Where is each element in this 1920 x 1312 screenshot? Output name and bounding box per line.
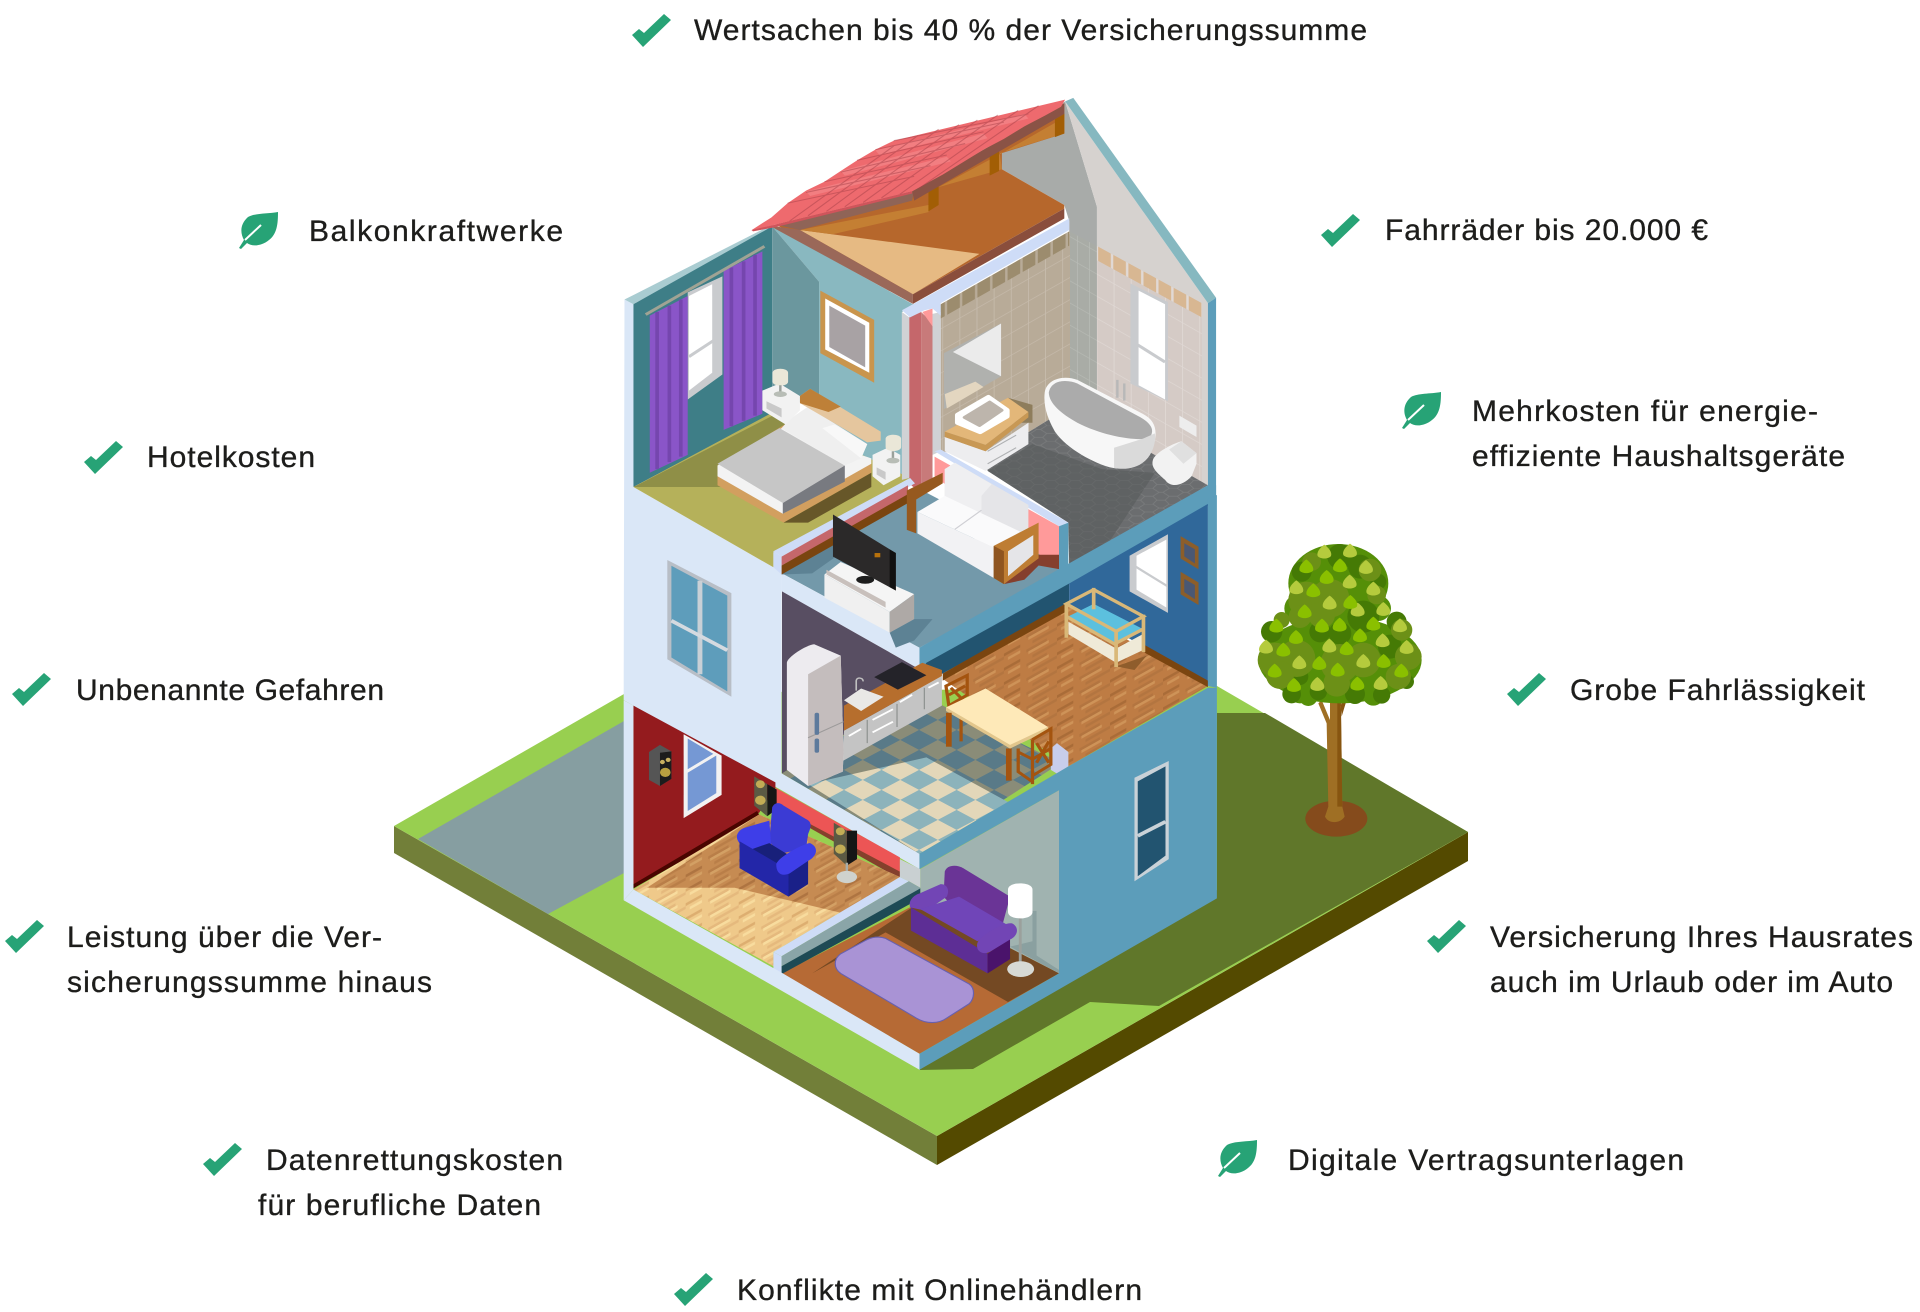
left facade window — [667, 560, 731, 697]
roof tiles — [752, 100, 1065, 231]
item: Versicherung Ihres Hausrates — [1427, 920, 1913, 999]
house left facade — [624, 300, 919, 869]
bathroom — [941, 231, 1208, 567]
bedroom — [624, 225, 914, 567]
item: Grobe Fahrlässigkeit: Grobe Fahrlässigkeit — [1570, 674, 1866, 707]
gable walls — [992, 98, 1216, 505]
item: Mehrkosten — [1402, 392, 1845, 473]
item: Versicherung Ihres Hausrates: Versicherung Ihres Hausrates — [1490, 921, 1913, 954]
item: Balkonkraftwerke: Balkonkraftwerke — [309, 215, 563, 248]
item: Leistung — [5, 920, 432, 999]
rug — [835, 937, 974, 1023]
floor lamp — [1007, 883, 1059, 977]
item: Mehrkosten: effiziente Haushaltsgeräte — [1472, 440, 1845, 473]
red room — [633, 706, 900, 966]
picture frame — [820, 291, 874, 383]
item: Leistung: sicherungssumme hinaus — [67, 966, 432, 999]
item: Wertsachen: Wertsachen bis 40 % der Versicherungssumme — [694, 14, 1367, 47]
wall speaker — [649, 745, 671, 786]
counter and cabinets — [843, 662, 942, 761]
item: Fahrräder: Fahrräder bis 20.000 € — [1385, 214, 1708, 247]
item: Unbenannte Gefahren: Unbenannte Gefahren — [76, 674, 384, 707]
item: Konflikte mit Onlinehändlern: Konflikte mit Onlinehändlern — [737, 1274, 1142, 1307]
TV stand and TV — [824, 514, 933, 648]
bathtub — [1044, 378, 1156, 469]
vanity — [945, 397, 1032, 471]
crib — [1066, 588, 1147, 670]
ceiling and rafters — [772, 103, 1064, 304]
mirror — [944, 323, 1001, 409]
item: Balkonkraftwerke — [239, 212, 563, 249]
interior dividing wall — [902, 219, 1069, 494]
tree — [1258, 544, 1422, 837]
divider wall — [773, 859, 920, 974]
blue armchair — [737, 803, 816, 897]
item: Digitale Vertragsunterlagen: Digitale Vertragsunterlagen — [1288, 1144, 1684, 1177]
front slab edge — [919, 485, 1216, 669]
tree trunk — [1305, 687, 1367, 837]
exterior right wall — [624, 495, 1217, 1070]
lower right room — [773, 790, 1059, 1054]
window — [684, 734, 722, 818]
item: Leistung: Leistung über die Ver- — [67, 921, 382, 954]
item: Datenrettungskosten: für berufliche Daten — [258, 1189, 541, 1222]
tree crown — [1258, 544, 1422, 706]
floor speakers — [754, 776, 857, 883]
fridge — [787, 644, 844, 786]
item: Datenrettungskosten: Datenrettungskosten — [266, 1144, 563, 1177]
sofa — [907, 463, 1039, 584]
window and curtains — [646, 246, 764, 473]
dining room and nursery — [922, 504, 1208, 766]
toilet — [1152, 416, 1196, 485]
house upper floor — [624, 98, 1216, 869]
living room — [773, 449, 1069, 648]
item: Versicherung Ihres Hausrates: auch im Urlaub oder im Auto — [1490, 966, 1893, 999]
dining table and chairs — [946, 675, 1068, 784]
purple sofa — [910, 866, 1017, 973]
item: Hotelkosten: Hotelkosten — [147, 441, 315, 474]
item: Datenrettungskosten — [203, 1143, 563, 1222]
bed — [718, 369, 901, 523]
item: Mehrkosten: Mehrkosten für energie- — [1472, 395, 1818, 428]
kitchen — [782, 591, 1068, 854]
ground plot — [394, 686, 1468, 1165]
house lower floors — [624, 495, 1217, 1070]
